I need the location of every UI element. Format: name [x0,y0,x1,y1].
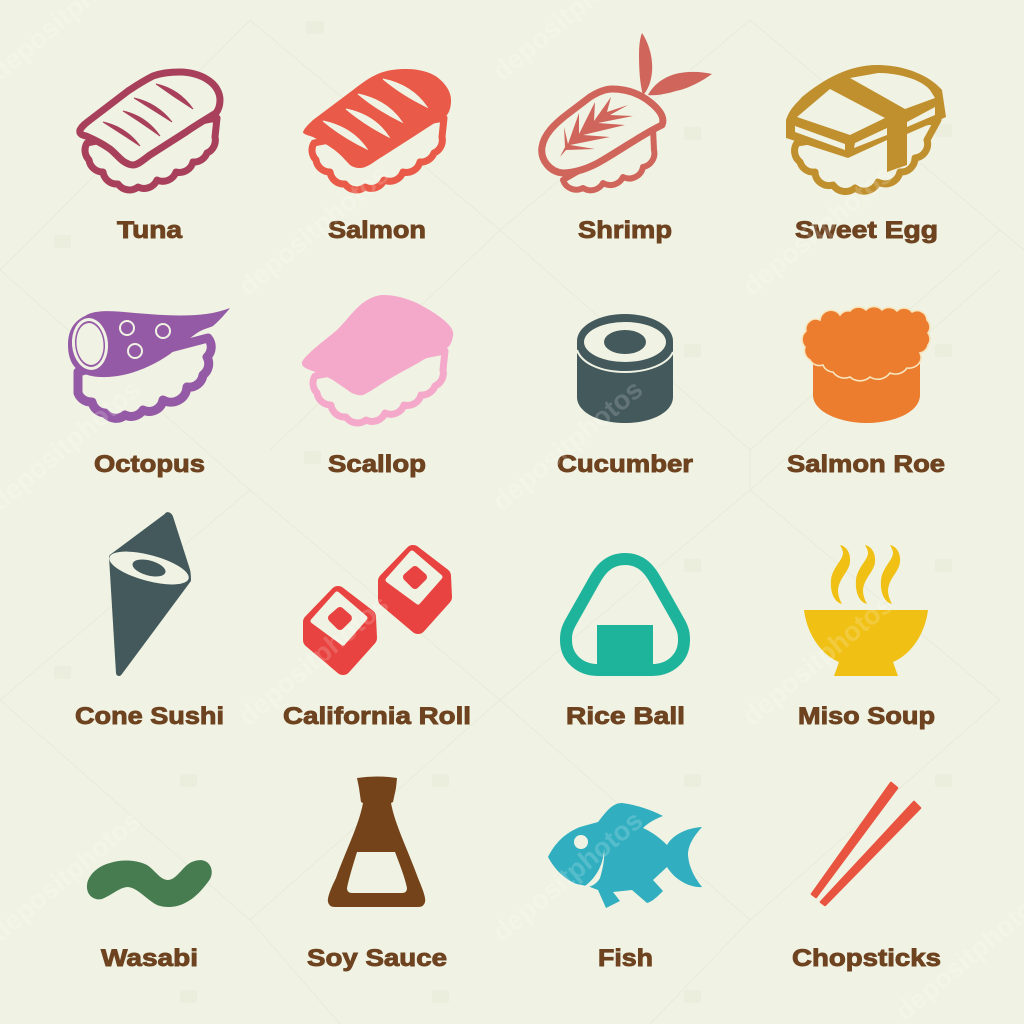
icon: rice ball [566,559,684,673]
text: depositphotos [737,589,898,732]
icon: salmon roe nigiri [802,307,930,423]
label: Miso Soup: Miso Soup [798,703,935,730]
icon: salmon nigiri [303,69,451,190]
label: Sweet Egg: Sweet Egg [795,217,938,244]
label: Shrimp: Shrimp [578,217,672,244]
icon: wasabi [87,860,212,907]
text: depositphotos [737,159,898,302]
text: depositphotos [487,805,648,948]
label: Cone Sushi: Cone Sushi [75,703,224,730]
icon: soy sauce bottle [328,776,425,907]
label: California Roll: California Roll [283,703,471,730]
text: depositphotos [233,589,394,732]
icon: tuna nigiri [80,72,220,190]
icon: miso soup bowl [804,545,928,676]
label: Octopus: Octopus [94,451,205,478]
text: depositphotos [487,374,648,517]
label: Cucumber: Cucumber [557,451,693,478]
label: Soy Sauce: Soy Sauce [307,945,447,972]
label: Fish: Fish [598,945,653,972]
label: Rice Ball: Rice Ball [566,703,685,730]
label: Tuna: Tuna [117,217,183,244]
icon: scallop nigiri [302,295,453,423]
icon: shrimp nigiri [542,33,712,190]
label: Wasabi: Wasabi [101,945,198,972]
icon: chopsticks [812,783,920,905]
icon: fish [548,803,702,908]
icon: california rolls [311,553,444,667]
label: Scallop: Scallop [328,451,426,478]
label: Chopsticks: Chopsticks [792,945,941,972]
label: Salmon Roe: Salmon Roe [787,451,945,478]
icon: sweet egg nigiri [786,65,946,192]
icon: cone sushi [106,515,192,673]
text: depositphotos [233,159,394,302]
label: Salmon: Salmon [328,217,426,244]
icon: cucumber roll [577,314,673,423]
icon: octopus nigiri [68,308,230,418]
